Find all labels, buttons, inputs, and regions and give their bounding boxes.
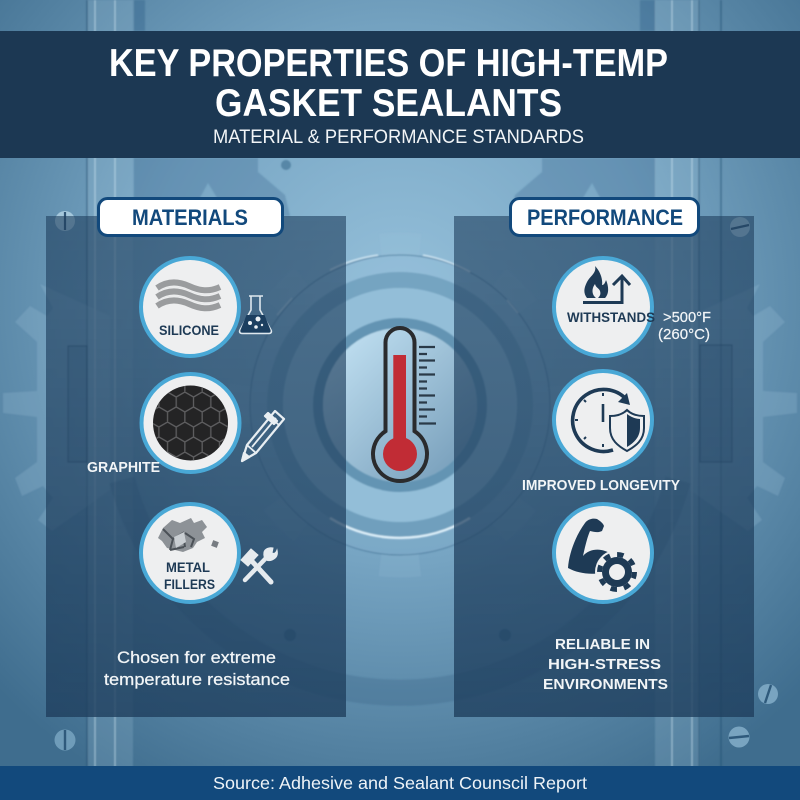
graphite circle: [142, 374, 240, 472]
title banner: [0, 31, 800, 158]
text: reliable in high-stress environments: HIGH-STRESS: [548, 656, 661, 673]
footer: source: Source: Adhesive and Sealant Counscil Report: [213, 773, 587, 793]
footer: source: [0, 766, 800, 800]
metal fillers circle: FILLERS: [164, 577, 215, 592]
silicone circle: SILICONE: [159, 323, 219, 338]
text: reliable in high-stress environments: RELIABLE IN: [555, 636, 650, 653]
heading: performance: [510, 198, 698, 236]
text: chosen for extreme temperature resistance: [104, 648, 290, 689]
side gear left: [3, 284, 110, 531]
icon: pencil: [242, 411, 284, 461]
text: chosen for extreme temperature resistance: Chosen for extreme: [117, 648, 276, 667]
side gear right: [690, 284, 797, 531]
panel: performance: [454, 198, 754, 717]
panel: materials: [46, 198, 346, 717]
heading: performance: PERFORMANCE: [527, 205, 683, 230]
metal fillers circle: METAL: [166, 560, 210, 575]
label: graphite: GRAPHITE: [87, 460, 160, 476]
icon: flask: [240, 296, 271, 334]
title: GASKET SEALANTS: [215, 82, 562, 125]
text: reliable in high-stress environments: [543, 636, 668, 693]
title: [109, 42, 668, 125]
silicone circle: [141, 258, 239, 356]
metal fillers circle: [141, 504, 239, 602]
label: improved longevity: IMPROVED LONGEVITY: [522, 478, 680, 494]
text: chosen for extreme temperature resistance: temperature resistance: [104, 670, 290, 689]
central gear assembly: [122, 244, 678, 693]
reliability circle: [554, 504, 652, 602]
text: reliable in high-stress environments: ENVIRONMENTS: [543, 676, 668, 693]
withstands circle: WITHSTANDS: [567, 309, 655, 325]
title: KEY PROPERTIES OF HIGH-TEMP: [109, 42, 668, 85]
heading: materials: MATERIALS: [132, 205, 248, 230]
text: temperature rating: (260°C): [658, 326, 710, 343]
subtitle: MATERIAL & PERFORMANCE STANDARDS: [213, 126, 584, 148]
icon: thermometer: [373, 328, 436, 481]
text: temperature rating: [658, 309, 711, 343]
icon: hammer and wrench: [241, 548, 277, 582]
screws: [54, 211, 778, 750]
heading: materials: [98, 198, 282, 236]
longevity circle: [554, 371, 652, 469]
text: temperature rating: >500°F: [663, 309, 711, 326]
withstands circle: [554, 258, 655, 356]
